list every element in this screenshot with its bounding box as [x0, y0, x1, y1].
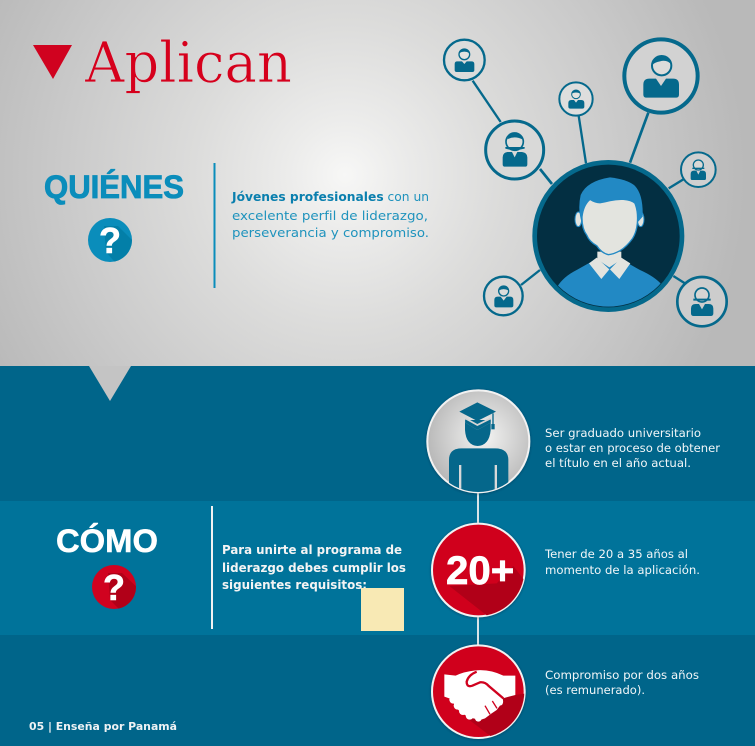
cap	[459, 402, 496, 421]
requirements icons	[427, 390, 529, 738]
text block: quiénes	[231, 189, 429, 240]
divider: cómo	[211, 506, 213, 629]
collar	[589, 258, 630, 279]
requirement text: commitment: (es remunerado).	[545, 683, 645, 697]
shoulders	[558, 262, 660, 307]
satellite: small man top	[559, 82, 593, 116]
panel: lower blue band	[0, 635, 755, 746]
text block: cómo: liderazgo debes cumplir los	[222, 561, 406, 575]
head	[465, 420, 491, 446]
icon: blue question mark: ?	[99, 220, 121, 261]
icon: 20+: 20+	[446, 549, 514, 593]
connector: requirements line	[477, 490, 479, 650]
satellite: large man top right	[624, 39, 698, 113]
text block: quiénes: perseverancia y compromiso.	[232, 225, 429, 240]
heading: cómo: CÓMO	[56, 523, 158, 559]
text block: quiénes: Jóvenes profesionales con un	[231, 189, 429, 204]
body	[449, 448, 508, 493]
icon: handshake	[432, 645, 527, 738]
panel: quiénes background	[0, 0, 755, 367]
requirement text: age: Tener de 20 a 35 años al	[544, 547, 688, 561]
requirement text: age	[544, 547, 700, 577]
connectors	[473, 81, 685, 285]
requirement text: degree: o estar en proceso de obtener	[545, 441, 720, 455]
face	[582, 199, 638, 255]
icon: central person	[535, 162, 682, 313]
satellite: woman bottom right	[677, 277, 727, 326]
divider: quiénes	[214, 163, 216, 288]
title: Aplican	[84, 31, 292, 96]
requirement text: commitment	[545, 668, 699, 697]
text block: quiénes: excelente perfil de liderazgo,	[232, 208, 428, 223]
requirement text: degree: el título en el año actual.	[545, 456, 691, 470]
icon: blue question mark	[88, 218, 132, 262]
text block: cómo: Para unirte al programa de	[222, 543, 402, 557]
text block: cómo: siguientes requisitos:	[222, 578, 367, 592]
icon: red question mark: ?	[103, 567, 125, 608]
panel: cómo band	[0, 501, 755, 635]
speech pointer	[89, 366, 131, 401]
icon: graduate	[427, 390, 529, 493]
sticky note	[361, 588, 404, 631]
icon: red question mark	[92, 565, 136, 609]
requirement text: commitment: Compromiso por dos años	[545, 668, 699, 682]
requirement text: degree	[545, 426, 720, 470]
ears	[575, 212, 582, 227]
text block: cómo	[222, 543, 406, 592]
satellite: man bottom left	[484, 277, 523, 315]
hair	[579, 177, 643, 223]
requirement text: age: momento de la aplicación.	[545, 563, 700, 577]
icon: 20+	[432, 524, 527, 617]
panel: upper blue band	[0, 366, 755, 501]
heading: quiénes: QUIÉNES	[44, 169, 184, 205]
satellite: woman right	[681, 152, 716, 187]
neck	[597, 252, 621, 267]
footer: 05 | Enseña por Panamá	[29, 720, 177, 733]
satellite: man top left	[444, 40, 485, 80]
requirement text: degree: Ser graduado universitario	[545, 426, 701, 440]
satellite: woman left	[486, 121, 544, 179]
icon: title triangle	[33, 45, 72, 79]
chart: people network	[444, 39, 727, 326]
